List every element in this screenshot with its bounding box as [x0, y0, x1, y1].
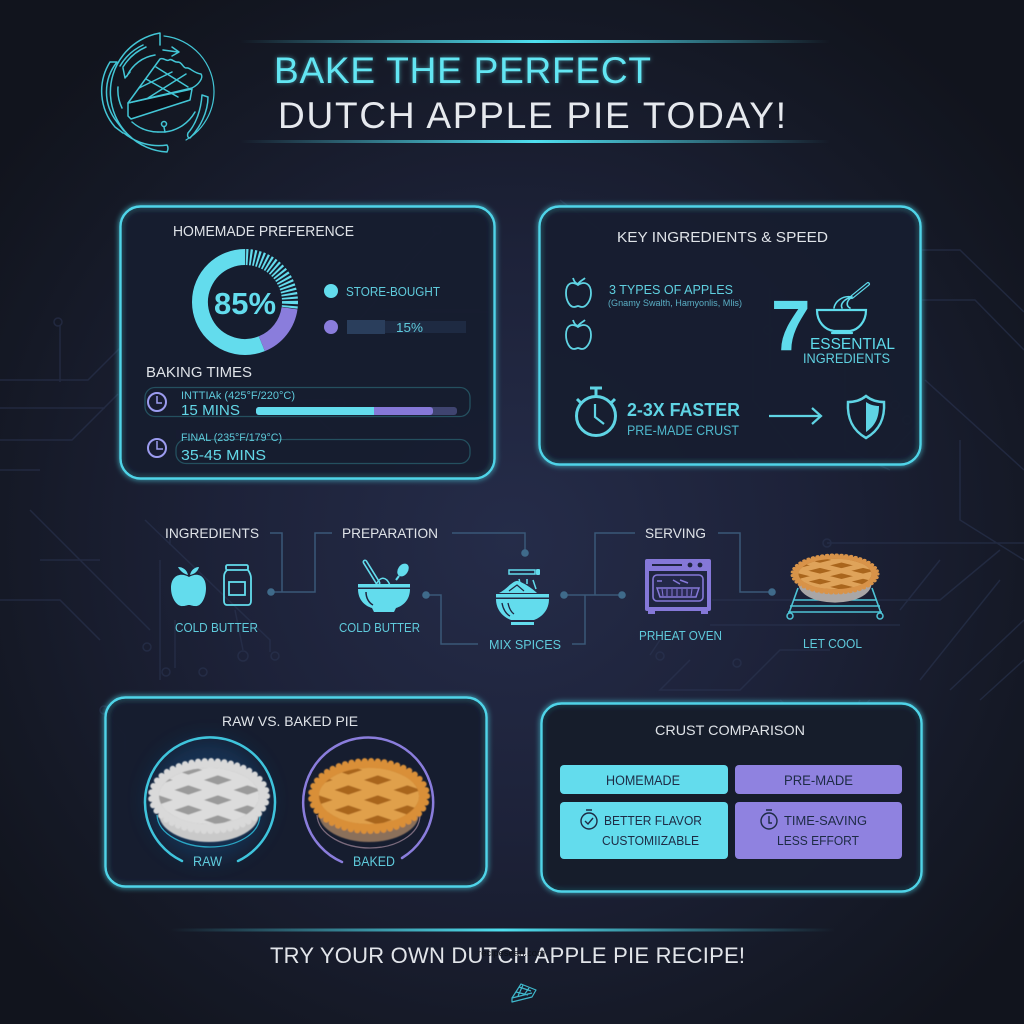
card: pre-made benefits: [735, 802, 902, 859]
panel: key ingredients and speed: [540, 206, 920, 464]
label: raw: RAW: [193, 853, 223, 869]
footer rule: [170, 928, 835, 932]
label: cold butter two: COLD BUTTER: [339, 620, 420, 635]
text: essential: ESSENTIAL: [810, 336, 895, 353]
icon: oven: [645, 559, 711, 614]
title rule bottom: [240, 140, 830, 143]
label: let cool: LET COOL: [803, 636, 862, 651]
icon: stopwatch: [576, 388, 616, 436]
label: baked: BAKED: [353, 853, 395, 869]
arrow: [769, 408, 821, 424]
row: final bake: 35-45 MINS: [181, 447, 266, 464]
title line 2: DUTCH APPLE PIE TODAY!: [278, 95, 786, 136]
text: three types of apples: (Gnamy Swalth, Hamyonlis, Mlis): [608, 298, 742, 308]
donut chart 85 percent: 85%: [214, 286, 276, 321]
heading: baking times: BAKING TIMES: [146, 364, 252, 381]
label: preheat oven: PRHEAT OVEN: [639, 628, 722, 643]
label: cold butter one: COLD BUTTER: [175, 620, 258, 635]
step heading: preparation: PREPARATION: [342, 525, 438, 541]
panel: raw vs baked pie: [106, 698, 486, 886]
icon: apple one: [566, 278, 591, 307]
title line 1: BAKE THE PERFECT: [274, 50, 651, 91]
text: three types of apples: [608, 282, 742, 308]
raw pie with ring: [145, 737, 275, 874]
donut chart 85 percent: [192, 249, 298, 355]
icon: shield: [848, 396, 884, 438]
card: homemade benefits: CUSTOMIIZABLE: [602, 834, 699, 848]
tag: pre-made: PRE-MADE: [784, 773, 853, 788]
legend: 15 percent: 15%: [396, 320, 423, 335]
row: initial bake: [145, 388, 470, 419]
heading: key ingredients: KEY INGREDIENTS & SPEED: [617, 230, 828, 246]
panel: homemade preference and baking times: [120, 206, 494, 478]
connector lines: [267, 533, 776, 644]
tag: homemade: [560, 765, 728, 794]
logo: pie in circular arrows: [102, 33, 214, 152]
stat: seven: 7: [771, 287, 810, 366]
panel: crust comparison: [542, 704, 922, 892]
text: three types of apples: 3 TYPES OF APPLES: [609, 282, 733, 297]
icon: mixing bowl with spoon: [358, 561, 411, 612]
row: final bake: [148, 430, 470, 464]
icon: small pie slice: [512, 984, 536, 1002]
title rule top: [240, 40, 830, 43]
text: ingredients: INGREDIENTS: [803, 351, 890, 366]
icon: filled apple: [171, 567, 206, 606]
footer call to action: TRY YOUR OWN DUTCH APPLE PIE RECIPE!: [270, 943, 745, 968]
card: pre-made benefits: TIME-SAVING: [784, 813, 867, 828]
row: initial bake: INTTIAk (425°F/220°C): [181, 390, 295, 402]
heading: homemade preference: HOMEMADE PREFERENCE: [173, 224, 354, 240]
icon: jar: [224, 565, 251, 605]
legend: store-bought: STORE-BOUGHT: [346, 284, 440, 299]
icon: bowl and whisk: [817, 284, 868, 333]
watermark: recipesean.com: [478, 948, 545, 958]
text: pre-made crust: PRE-MADE CRUST: [627, 422, 739, 438]
icon: pie on cooling rack: [787, 547, 883, 619]
icon: sifter over bowl: [496, 569, 549, 625]
card: homemade benefits: BETTER FLAVOR: [604, 813, 702, 828]
text: faster: 2-3X FASTER: [627, 400, 740, 420]
card: pre-made benefits: LESS EFFORT: [777, 833, 859, 848]
row: initial bake: 15 MINS: [181, 403, 240, 419]
heading: raw vs baked: RAW VS. BAKED PIE: [222, 713, 358, 729]
step heading: serving: SERVING: [645, 525, 706, 541]
tag: homemade: HOMEMADE: [606, 773, 680, 788]
icon: apple two: [566, 320, 591, 349]
card: homemade benefits: [560, 802, 728, 859]
heading: crust comparison: CRUST COMPARISON: [655, 722, 805, 738]
tag: pre-made: [735, 765, 902, 794]
row: final bake: FINAL (235°F/179°C): [181, 432, 282, 444]
step heading: ingredients: INGREDIENTS: [165, 525, 259, 541]
label: mix spices: MIX SPICES: [489, 637, 561, 652]
baked pie with ring: [303, 737, 433, 874]
legend: 15 percent: [324, 320, 466, 335]
